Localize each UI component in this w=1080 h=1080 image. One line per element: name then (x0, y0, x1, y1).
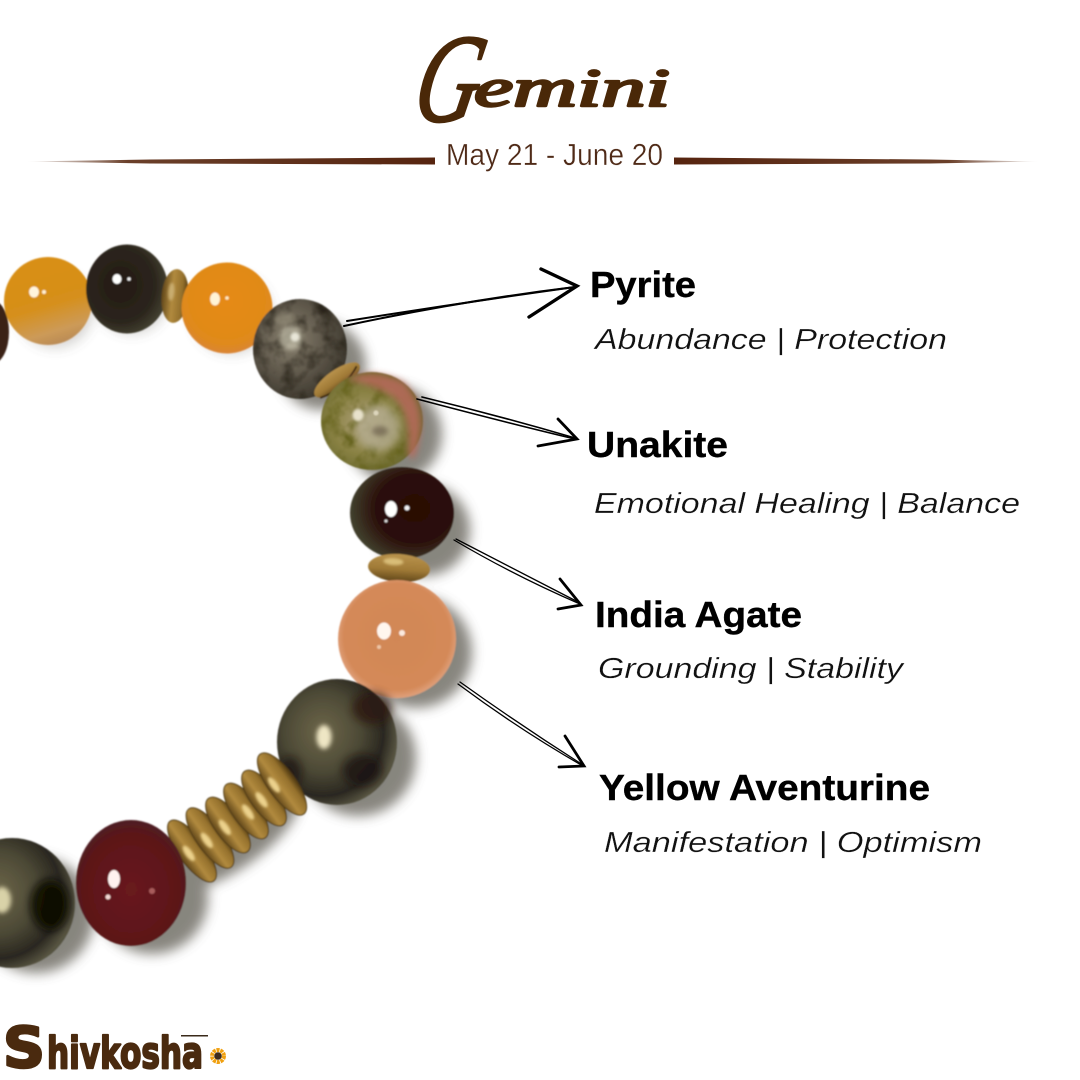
bead: unakite (321, 372, 423, 470)
label: yellow aventurine: Yellow Aventurine (599, 767, 930, 808)
label: india agate: Grounding | Stability (598, 653, 905, 685)
arrow: india agate (454, 539, 581, 609)
label: yellow aventurine (599, 767, 982, 859)
label: india agate (595, 594, 905, 685)
title: G (404, 9, 497, 148)
logo: hivkosha (47, 1028, 203, 1079)
bead: orange (182, 262, 272, 354)
label: india agate: India Agate (595, 594, 802, 635)
label: pyrite: Pyrite (590, 264, 696, 305)
spacer: lower (367, 552, 431, 584)
arrow: unakite (417, 397, 577, 446)
date range: May 21 - June 20 (446, 137, 663, 172)
gold disc stack (159, 746, 315, 889)
bead: yellow aventurine top (4, 257, 92, 345)
label: unakite: Unakite (587, 424, 728, 465)
bead: pyrite (253, 299, 347, 399)
logo (3, 1016, 208, 1080)
logo macron (181, 1035, 208, 1036)
spacer: top (159, 268, 191, 324)
arrow: yellow aventurine (458, 682, 584, 767)
logo: S (3, 1016, 45, 1080)
label: unakite (587, 424, 1020, 520)
icon: sunflower (212, 1050, 224, 1062)
label: pyrite (590, 264, 947, 356)
title (404, 9, 670, 148)
bead: pyrite bottom left (0, 838, 75, 968)
bead: dark top (86, 244, 168, 334)
label: pyrite: Abundance | Protection (593, 324, 947, 356)
arrow: pyrite (344, 269, 577, 326)
bead: pyrite lower (277, 679, 397, 805)
title: emini (474, 58, 670, 118)
bead: dark red (350, 467, 454, 559)
bead: far left sliver (0, 300, 9, 364)
spacer: pyrite unakite (309, 356, 365, 404)
label: yellow aventurine: Manifestation | Optimism (604, 827, 982, 859)
bead: maroon (76, 820, 186, 946)
left rule (25, 158, 435, 164)
bead: peach agate (338, 580, 456, 698)
bead shadows (0, 262, 472, 973)
right rule (674, 158, 1040, 164)
label: unakite: Emotional Healing | Balance (594, 488, 1020, 520)
bracelet (0, 244, 472, 973)
